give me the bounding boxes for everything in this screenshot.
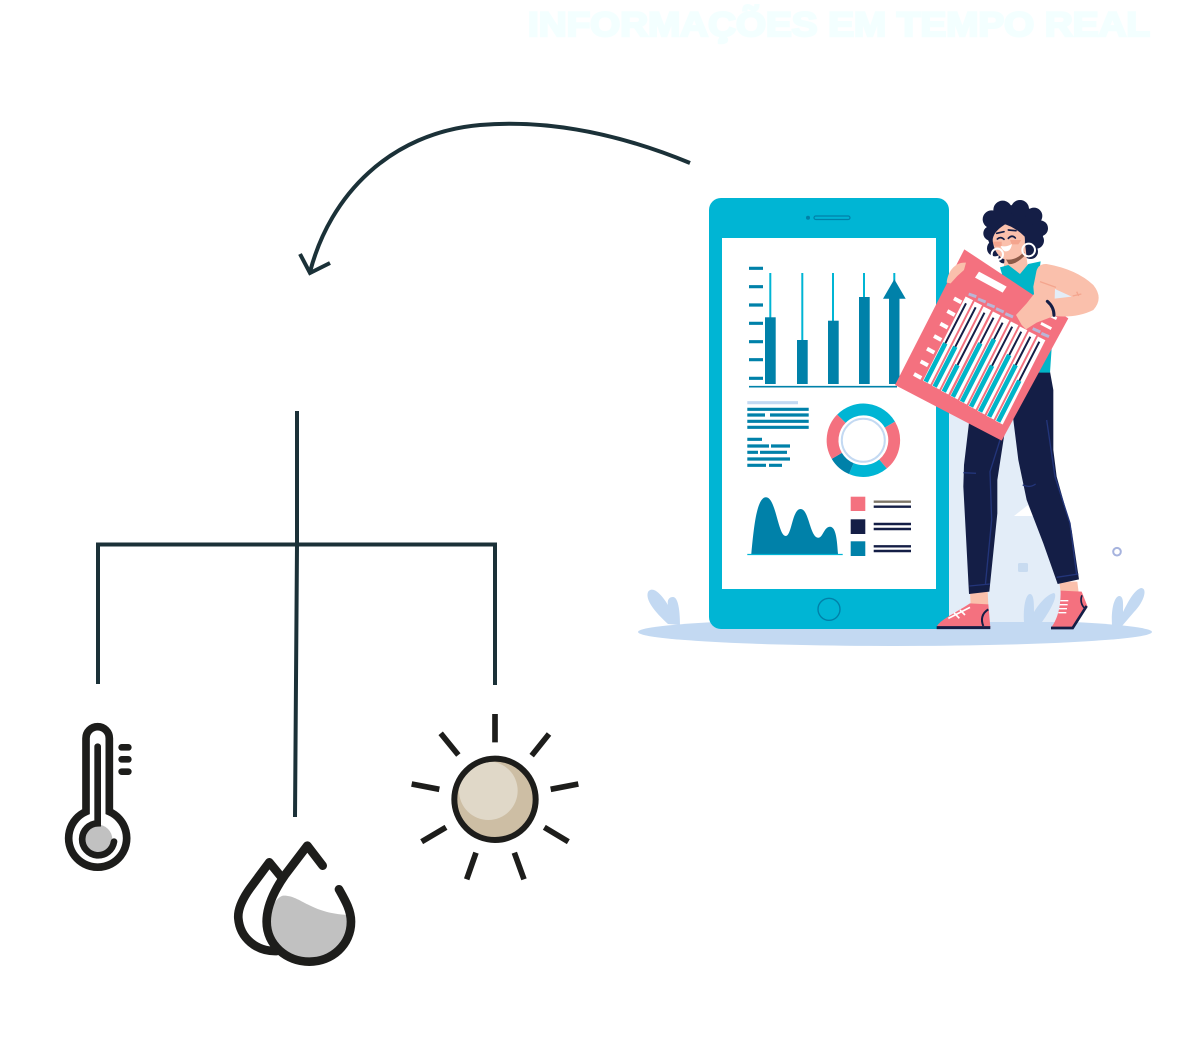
donut chart <box>833 409 894 471</box>
phone <box>709 198 949 629</box>
right arm <box>1016 264 1099 329</box>
sheet columns <box>927 298 1042 423</box>
icon: water drops <box>238 846 351 962</box>
bracelet <box>1047 301 1054 315</box>
sheet header <box>975 272 1007 293</box>
earrings <box>992 244 1035 260</box>
ankles <box>970 582 1079 605</box>
bar chart <box>749 268 906 387</box>
sheet column heads <box>969 294 1049 337</box>
sheet side ticks <box>1041 315 1057 329</box>
eyes <box>997 230 1016 239</box>
neck <box>1003 243 1030 278</box>
icon: sun <box>412 714 578 879</box>
title: INFORMAÇÕES EM TEMPO REAL <box>528 6 1150 44</box>
teal tank top <box>1000 261 1053 373</box>
phone speaker <box>806 216 850 220</box>
text lines <box>747 403 809 465</box>
small square accent <box>1018 563 1028 572</box>
arrow: curved from phone to diagram <box>300 124 690 273</box>
neck shadow <box>1006 252 1025 264</box>
person: upper body and report <box>895 200 1099 441</box>
legend <box>851 497 911 556</box>
illustration: phone and person <box>638 198 1152 646</box>
plant: right <box>1112 588 1145 626</box>
left shoe <box>937 603 990 627</box>
plant: left <box>647 590 680 625</box>
left hand <box>947 263 966 283</box>
connector tree <box>98 411 495 817</box>
ground shadow <box>638 618 1152 646</box>
face <box>993 224 1025 261</box>
background building shape <box>945 400 1062 622</box>
pants seams <box>963 420 1078 586</box>
home button <box>818 598 840 620</box>
sheet ticks <box>914 298 961 378</box>
sheet teal values <box>926 339 1019 422</box>
cheeks <box>993 240 1021 247</box>
elbow crease <box>1040 282 1081 296</box>
arm detail <box>1055 289 1072 299</box>
sheet dark values <box>945 303 1039 381</box>
icon: thermometer <box>69 727 128 867</box>
pants <box>963 372 1079 594</box>
person: legs and shoes <box>937 372 1087 628</box>
mouth <box>1001 244 1012 251</box>
right shoe <box>1051 591 1087 628</box>
white triangle accent <box>1014 505 1033 516</box>
area chart <box>747 497 843 554</box>
small ring accent <box>1113 548 1121 556</box>
hair <box>983 200 1048 263</box>
plant: middle <box>1024 593 1055 622</box>
report sheet <box>895 249 1068 441</box>
